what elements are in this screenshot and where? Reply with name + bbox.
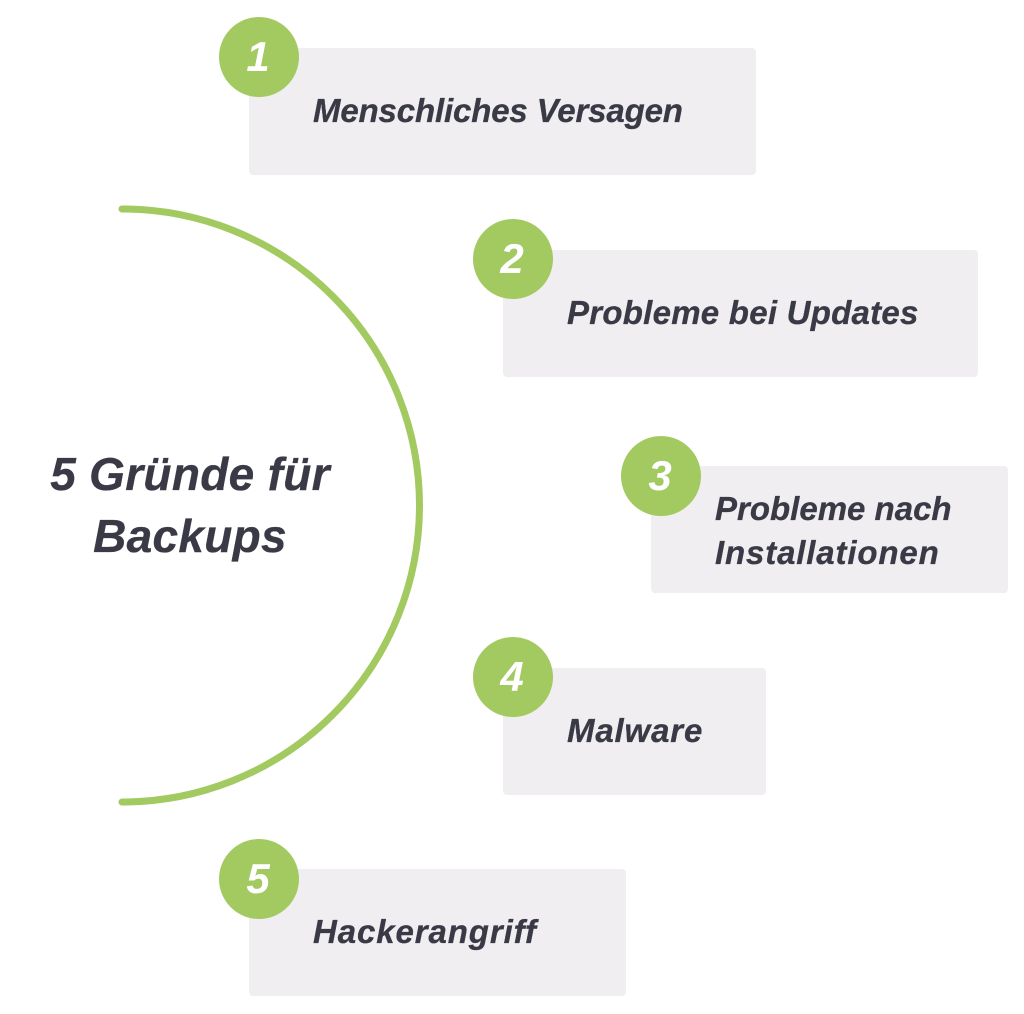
number badge 3: 3 <box>648 452 672 498</box>
label 4: Malware <box>567 712 703 749</box>
item 2 <box>473 219 978 377</box>
label 3: Probleme nach <box>715 490 952 527</box>
number badge 4: 4 <box>500 653 524 700</box>
item 3 <box>621 436 1008 593</box>
number badge 3 <box>621 436 701 516</box>
number badge 5: 5 <box>246 854 270 902</box>
label 3 <box>715 490 952 571</box>
label 1: Menschliches Versagen <box>313 92 683 129</box>
number badge 2: 2 <box>500 235 524 282</box>
panel 2 <box>503 250 978 377</box>
item 4 <box>473 637 766 795</box>
number badge 1 <box>219 17 299 97</box>
item 5 <box>219 839 626 996</box>
panel 4 <box>503 668 766 795</box>
label 5: Hackerangriff <box>313 913 537 950</box>
title: Backups <box>93 510 287 562</box>
number badge 5 <box>219 838 299 918</box>
number badge 2 <box>473 219 553 299</box>
panel 1 <box>249 48 756 175</box>
number badge 1: 1 <box>246 33 270 80</box>
title <box>50 448 332 562</box>
title: 5 Gründe für <box>50 448 330 500</box>
label 3: Installationen <box>715 534 940 571</box>
label 2: Probleme bei Updates <box>567 294 919 331</box>
number badge 4 <box>473 637 553 717</box>
panel 5 <box>249 868 626 996</box>
panel 3 <box>651 466 1008 593</box>
item 1 <box>219 17 756 175</box>
